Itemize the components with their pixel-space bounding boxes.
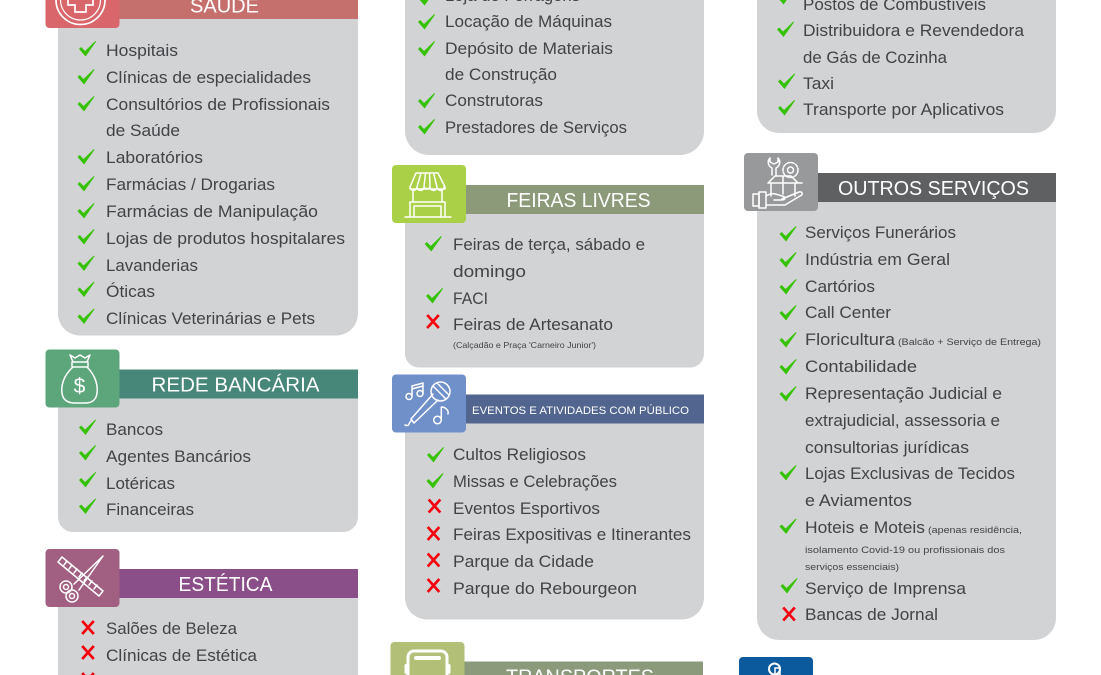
heading: transportes — [458, 662, 703, 675]
item: Feiras de Artesanato: Feiras de Artesanato — [453, 315, 613, 334]
item: Feiras Expositivas e Itinerantes: Feiras Expositivas e Itinerantes — [453, 525, 691, 544]
item: Lavanderias: Lavanderias — [106, 256, 198, 275]
item: Transporte por Aplicativos: Transporte por Aplicativos — [803, 100, 1004, 119]
heading: outros serviços — [810, 173, 1056, 202]
item: Contabilidade: Contabilidade — [805, 357, 917, 376]
item: Óticas: Óticas — [106, 282, 155, 301]
item: Clínicas Veterinárias e Pets: Clínicas Veterinárias e Pets — [106, 309, 315, 328]
item: Floricultura: (Balcão + Serviço de Entrega) — [898, 337, 1041, 347]
item: Consultórios de Profissionais de Saúde — [78, 95, 330, 140]
item: Missas e Celebrações: Missas e Celebrações — [453, 472, 617, 491]
item: Construtoras: Construtoras — [445, 91, 543, 110]
item: Depósito de Materiais de Construção — [418, 39, 613, 84]
item: Representação Judicial — [780, 384, 1002, 457]
icon: medical cross — [46, 0, 120, 28]
item: Parque do Rebourgeon: Parque do Rebourgeon — [453, 579, 637, 598]
panel: estética — [46, 549, 358, 675]
item: Floricultura: Floricultura — [805, 330, 896, 349]
item: FACI — [426, 288, 488, 308]
item: Depósito de Materiais de Construção: de Construção — [445, 65, 557, 84]
item: Farmácias / Drogarias: Farmácias / Drogarias — [106, 175, 275, 194]
item: Financeiras: Financeiras — [106, 500, 194, 519]
item: Lojas Exclusivas de Tecidos e Aviamentos: e Aviamentos — [805, 491, 912, 510]
heading: saúde — [110, 0, 358, 19]
item: Bancos — [79, 420, 163, 439]
item: Lojas Exclusivas de Tecidos e Aviamentos — [780, 464, 1015, 510]
heading: rede bancária: REDE BANCÁRIA — [152, 374, 320, 396]
item: Floricultura — [780, 330, 1041, 349]
icon: comb and scissors — [46, 549, 120, 607]
item: Cultos Religiosos: Cultos Religiosos — [453, 445, 586, 464]
panel: transportes — [390, 642, 703, 675]
item: Eventos Esportivos: Eventos Esportivos — [453, 499, 600, 518]
item: Clínicas de especialidades: Clínicas de especialidades — [106, 68, 311, 87]
item: Parque da Cidade: Parque da Cidade — [453, 552, 594, 571]
heading: outros serviços: OUTROS SERVIÇOS — [838, 178, 1029, 200]
heading: eventos e atividades com público — [460, 394, 704, 424]
item: Lojas de Cosméticos — [82, 673, 270, 675]
item: Distribuidora e Revendedora de Gás de Cozinha: de Gás de Cozinha — [803, 48, 948, 67]
item: Hoteis e Moteis: isolamento Covid-19 ou profissionais dos — [805, 545, 1006, 555]
item: Prestadores de Serviços: Prestadores de Serviços — [445, 118, 627, 137]
item: Serviço de Imprensa: Serviço de Imprensa — [805, 579, 967, 598]
item: Representação Judicial: Representação Judicial e — [805, 384, 1002, 403]
item: Hoteis e Moteis: (apenas residência, — [928, 525, 1022, 535]
item: Lojas de produtos hospitalares: Lojas de produtos hospitalares — [106, 229, 345, 248]
item: Locação de Máquinas: Locação de Máquinas — [445, 12, 612, 31]
heading: feiras livres: FEIRAS LIVRES — [506, 190, 650, 212]
panel: outros serviços — [744, 153, 1056, 640]
item: FACI: FACI — [453, 289, 488, 308]
icon: money bag: $ — [74, 375, 86, 398]
item: Feiras de terça, sábado e domingo: domingo — [453, 262, 526, 281]
item: Óticas — [78, 282, 155, 301]
item: Distribuidora e Revendedora de Gás de Cozinha — [777, 21, 1025, 67]
item: Depósito de Materiais de Construção: Depósito de Materiais — [445, 39, 613, 58]
item: Farmácias de Manipulação: Farmácias de Manipulação — [106, 202, 318, 221]
item: Laboratórios: Laboratórios — [106, 148, 203, 167]
item: Cartórios: Cartórios — [805, 277, 875, 296]
item: Hoteis e Moteis: serviços essenciais) — [805, 562, 899, 572]
item: Salões de Beleza: Salões de Beleza — [106, 619, 238, 638]
item: Clínicas de Estética: Clínicas de Estética — [106, 646, 258, 665]
item: Agentes Bancários: Agentes Bancários — [106, 447, 251, 466]
heading: estética — [110, 569, 358, 598]
item: Hospitais: Hospitais — [106, 41, 178, 60]
item: Lojas Exclusivas de Tecidos e Aviamentos: Lojas Exclusivas de Tecidos — [805, 464, 1015, 483]
item: Consultórios de Profissionais de Saúde: Consultórios de Profissionais — [106, 95, 330, 114]
icon: microphone and notes — [392, 374, 466, 432]
panel: rede bancária — [46, 350, 358, 532]
item: Bancos: Bancos — [106, 420, 163, 439]
item: Bancas de Jornal: Bancas de Jornal — [805, 605, 938, 624]
item: Distribuidora e Revendedora de Gás de Cozinha: Distribuidora e Revendedora — [803, 21, 1025, 40]
item: Taxi — [778, 74, 834, 93]
item: Lotéricas — [79, 472, 175, 493]
panel: abastecimento e transporte — [757, 0, 1056, 133]
item: Feiras de terça, sábado e domingo — [425, 235, 645, 281]
icon: bus — [390, 642, 464, 675]
panel: comércio e serviços — [405, 0, 704, 155]
item: Feiras de Artesanato — [427, 315, 613, 350]
icon: box, tools and hand — [744, 153, 818, 211]
panel: saúde — [46, 0, 358, 336]
item: Call Center: Call Center — [805, 303, 891, 322]
item: Hoteis e Moteis: Hoteis e Moteis — [805, 518, 925, 537]
item: Representação Judicial: extrajudicial, assessoria e — [805, 411, 1000, 430]
panel: eventos e atividades com público — [392, 374, 704, 620]
item: Serviços Funerários: Serviços Funerários — [805, 223, 956, 242]
item: Taxi: Taxi — [803, 74, 834, 93]
item: Feiras de Artesanato: (Calçadão e Praça 'Carneiro Junior') — [453, 340, 596, 350]
item: Consultórios de Profissionais de Saúde: de Saúde — [106, 121, 180, 140]
icon: market stall — [392, 165, 466, 223]
icon: money bag — [46, 350, 120, 408]
item: Indústria em Geral: Indústria em Geral — [805, 250, 950, 269]
icon: blue category box — [739, 657, 813, 675]
heading: estética: ESTÉTICA — [178, 573, 273, 596]
heading: rede bancária — [110, 370, 358, 398]
heading: feiras livres — [460, 185, 704, 214]
item: Lotéricas: Lotéricas — [106, 474, 175, 493]
item: Representação Judicial: consultorias jurídicas — [805, 438, 969, 457]
heading: eventos e atividades com público: EVENTOS E ATIVIDADES COM PÚBLICO — [472, 404, 689, 417]
item: Feiras de terça, sábado e domingo: Feiras de terça, sábado e — [453, 235, 645, 254]
panel: feiras livres — [392, 165, 704, 368]
item: Hoteis e Moteis — [780, 518, 1022, 572]
